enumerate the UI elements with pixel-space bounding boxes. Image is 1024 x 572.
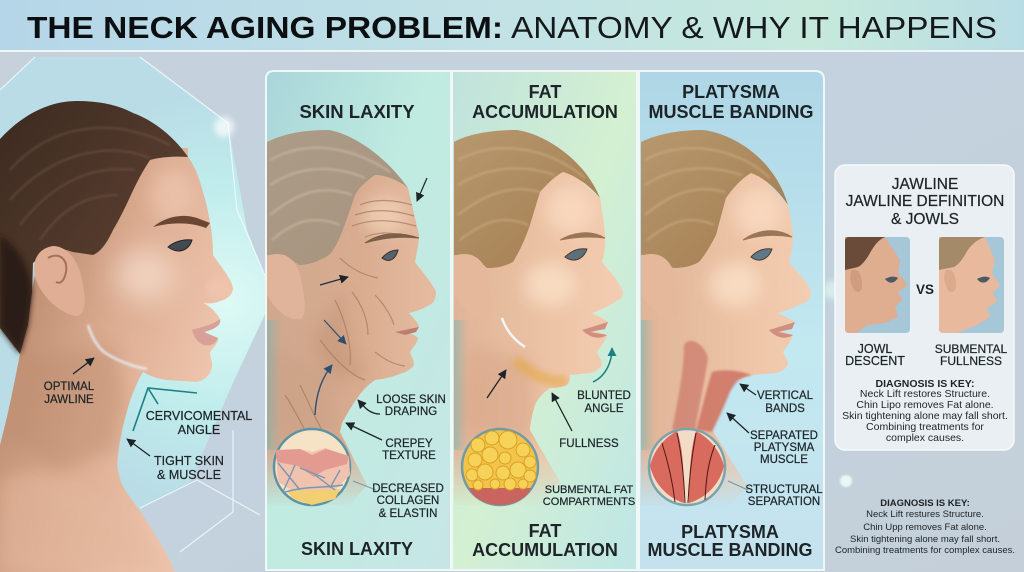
card heading: JAWLINE DEFINITION: [846, 193, 1004, 210]
lower diagnosis text: [835, 498, 1015, 556]
jaw highlight: [88, 325, 147, 369]
heading: platysma: PLATYSMA: [682, 82, 780, 102]
diagnosis text inside card: Combining treatments for: [866, 421, 984, 433]
labels: skin laxity: CREPEY: [385, 438, 433, 450]
panel: fat accumulation: [452, 71, 637, 570]
diagnosis text inside card: Chin Lipo removes Fat alone.: [856, 399, 994, 411]
inset: platysma muscle: [649, 429, 725, 505]
labels: fat accumulation: BLUNTED: [577, 390, 631, 402]
thumbnail: jowl descent: [845, 237, 910, 333]
eyebrow: [153, 216, 210, 228]
footer: platysma: MUSCLE BANDING: [648, 540, 812, 560]
hair: [267, 130, 408, 265]
inset: fat cells: [462, 429, 538, 505]
labels: platysma: VERTICAL: [757, 390, 814, 402]
footer: fat accumulation: FAT: [529, 521, 561, 541]
lower diagnosis text: Chin Upp removes Fat alone.: [863, 522, 987, 533]
vs label: VS: [916, 282, 934, 297]
wrinkles: [285, 200, 416, 435]
card heading: JAWLINE: [892, 176, 958, 193]
card: jawline definition and jowls: [835, 165, 1014, 450]
background glass hexagon shapes: [0, 57, 852, 552]
annotation: tight skin and muscle: [127, 439, 224, 482]
diagnosis text inside card: complex causes.: [886, 432, 964, 444]
thumbnail: submental fullness: [939, 237, 1004, 333]
arrows: platysma: [727, 384, 756, 490]
labels: platysma: MUSCLE: [760, 454, 808, 466]
eye: [168, 240, 192, 251]
labels: fat accumulation: [543, 390, 635, 508]
thumbnail captions: DESCENT: [845, 354, 905, 368]
jaw highlight: [502, 318, 525, 347]
annotation: cervicomental angle: [133, 388, 252, 437]
annotation: cervicomental angle: ANGLE: [178, 423, 220, 437]
ear: [34, 246, 85, 316]
lower diagnosis text: Combining treatments for complex causes.: [835, 545, 1015, 556]
annotation: cervicomental angle: CERVICOMENTAL: [146, 409, 252, 423]
heading: skin laxity: SKIN LAXITY: [299, 101, 415, 122]
lips: [582, 322, 608, 338]
ear: [641, 254, 679, 317]
diagnosis text inside card: Skin tightening alone may fall short.: [842, 410, 1008, 422]
face with muscle bands: [641, 130, 811, 505]
heading: platysma: [648, 82, 814, 122]
footer: fat accumulation: [472, 521, 618, 560]
labels: platysma: SEPARATION: [748, 496, 820, 508]
labels: platysma: SEPARATED: [750, 430, 818, 442]
labels: platysma: BANDS: [765, 403, 805, 415]
labels: skin laxity: LOOSE SKIN: [376, 394, 446, 406]
neck muscle bands: [672, 341, 752, 432]
labels: fat accumulation: COMPARTMENTS: [543, 496, 635, 508]
diagnosis text inside card: [842, 378, 1008, 444]
heading: fat accumulation: FAT: [529, 82, 561, 102]
labels: platysma: PLATYSMA: [754, 442, 815, 454]
labels: skin laxity: DRAPING: [385, 406, 437, 418]
title: THE NECK AGING PROBLEM:: [27, 10, 503, 45]
labels: fat accumulation: FULLNESS: [559, 438, 619, 450]
labels: platysma: STRUCTURAL: [745, 484, 823, 496]
annotation: optimal jawline: OPTIMAL: [44, 381, 95, 393]
lips: [192, 319, 220, 345]
header band: [0, 0, 1024, 52]
lower diagnosis text: Neck Lift restures Structure.: [866, 509, 984, 520]
labels: skin laxity: TEXTURE: [382, 450, 436, 462]
lips: [395, 327, 419, 335]
thumbnail captions: JOWL: [858, 342, 892, 356]
thumbnail captions: SUBMENTAL: [935, 342, 1008, 356]
heading: fat accumulation: [472, 82, 618, 122]
arrows: fat accumulation: [487, 348, 612, 431]
young woman profile: [0, 101, 233, 572]
lower diagnosis text: DIAGNOSIS IS KEY:: [880, 498, 970, 509]
thumbnail captions: [845, 342, 1008, 368]
diagnosis text inside card: DIAGNOSIS IS KEY:: [876, 378, 974, 390]
hair: [454, 130, 600, 268]
labels: fat accumulation: SUBMENTAL FAT: [545, 484, 633, 496]
annotation: optimal jawline: JAWLINE: [44, 394, 94, 406]
inset: skin cross-section: [274, 429, 350, 505]
labels: skin laxity: COLLAGEN: [377, 495, 439, 507]
labels: platysma: [745, 390, 823, 508]
labels: fat accumulation: ANGLE: [584, 403, 624, 415]
annotation: optimal jawline: [44, 358, 95, 406]
annotation: tight skin and muscle: & MUSCLE: [157, 468, 221, 482]
aged face: [267, 130, 436, 505]
thumbnail captions: FULLNESS: [940, 354, 1002, 368]
card heading: & JOWLS: [891, 211, 959, 228]
labels: skin laxity: & ELASTIN: [379, 508, 437, 520]
hair: [641, 130, 788, 268]
footer: platysma: PLATYSMA: [681, 522, 779, 542]
footer: skin laxity: SKIN LAXITY: [301, 539, 413, 559]
card heading: [846, 176, 1004, 228]
heading: platysma: MUSCLE BANDING: [648, 102, 814, 122]
eye and brow: [560, 233, 605, 240]
eye and brow: [743, 231, 792, 240]
footer: platysma: [648, 522, 812, 560]
eye and brow: [365, 234, 419, 243]
title part two: ANATOMY & WHY IT HAPPENS: [511, 10, 997, 45]
labels: skin laxity: DECREASED: [372, 483, 444, 495]
ear: [454, 254, 492, 319]
panel: platysma muscle banding: [639, 71, 824, 570]
fuller face: [454, 130, 623, 505]
diagnosis text inside card: Neck Lift restores Structure.: [860, 388, 990, 400]
heading: fat accumulation: ACCUMULATION: [472, 102, 618, 122]
footer: fat accumulation: ACCUMULATION: [472, 540, 618, 560]
arrows: skin laxity: [315, 178, 427, 490]
lips: [769, 322, 795, 338]
lower diagnosis text: Skin tightening alone may fall short.: [850, 534, 1000, 545]
annotation: tight skin and muscle: TIGHT SKIN: [154, 454, 224, 468]
labels: skin laxity: [372, 394, 446, 520]
hair: [0, 101, 188, 354]
panel: skin laxity: [266, 71, 451, 570]
ear: [267, 254, 305, 319]
